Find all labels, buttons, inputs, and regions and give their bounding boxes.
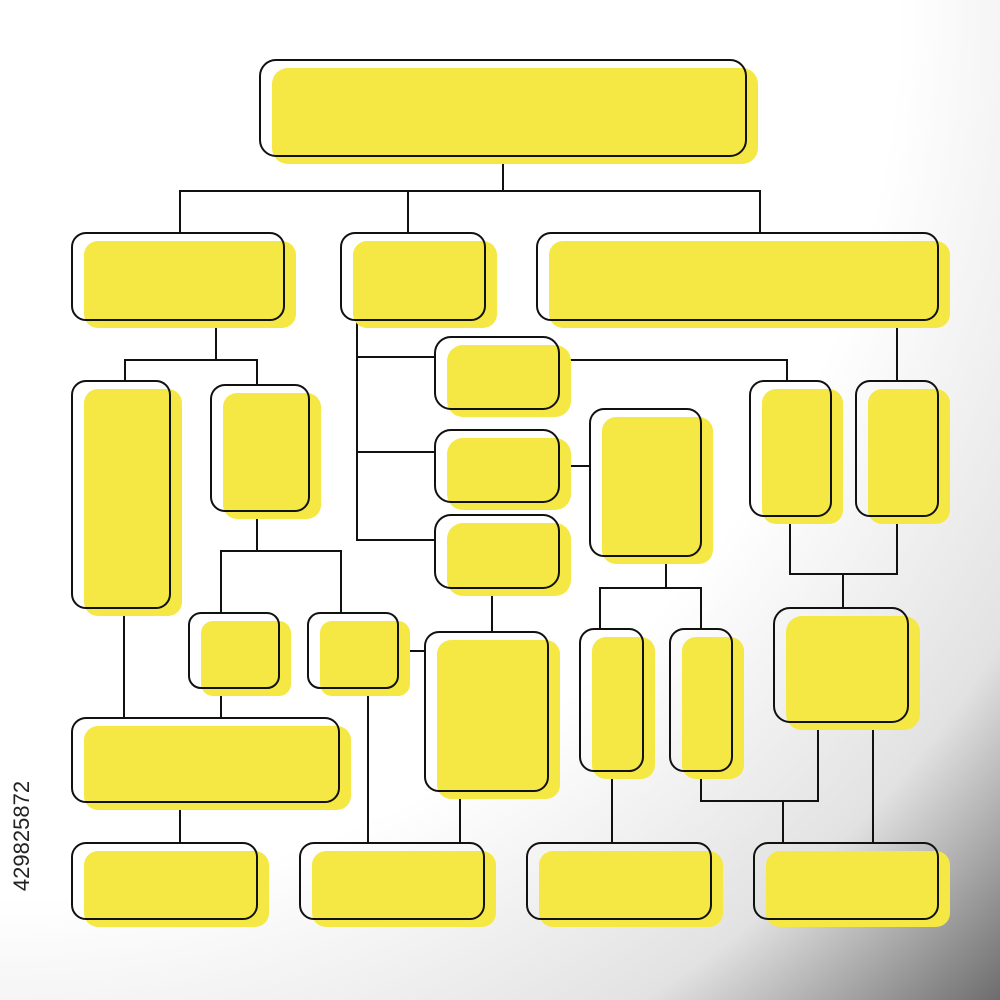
box: bottom 2 xyxy=(300,843,496,927)
box: Q xyxy=(774,608,920,730)
box: mid 3 xyxy=(435,515,571,596)
box: right pair 1 xyxy=(750,381,843,524)
box: bottom 4 xyxy=(754,843,950,927)
box: N xyxy=(425,632,560,799)
box: top xyxy=(260,60,758,164)
box: mid 1 xyxy=(435,337,571,417)
box: center tall xyxy=(590,409,713,564)
box: row2 left xyxy=(72,233,296,328)
box: bottom 1 xyxy=(72,843,269,927)
box: bottom 3 xyxy=(527,843,723,927)
box: tall left xyxy=(72,381,182,616)
box: P xyxy=(670,629,744,779)
box: left second xyxy=(211,385,321,519)
box: O xyxy=(580,629,655,779)
box: row2 right xyxy=(537,233,950,328)
box: mid 2 xyxy=(435,430,571,510)
connectors xyxy=(124,156,897,843)
stock id text: 429825872 xyxy=(9,781,34,891)
box: row2 middle xyxy=(341,233,497,328)
box: right pair 2 xyxy=(856,381,950,524)
box: R wide xyxy=(72,718,351,810)
box: small L xyxy=(189,613,291,696)
box: small M xyxy=(308,613,410,696)
